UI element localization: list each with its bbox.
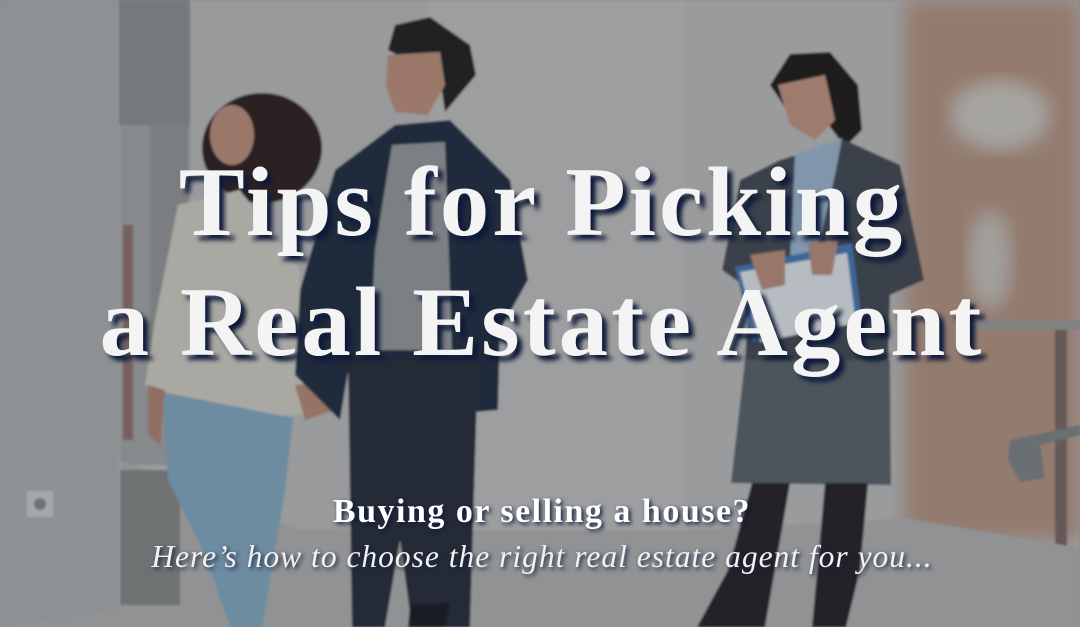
woman on the left bbox=[145, 93, 340, 627]
title bbox=[100, 148, 989, 384]
agent on the right bbox=[697, 52, 924, 627]
man in the middle bbox=[295, 17, 528, 627]
subtitle tagline: Here’s how to choose the right real estate agent for you... bbox=[151, 539, 933, 574]
subtitle question: Buying or selling a house? bbox=[333, 493, 751, 530]
title: Tips for Picking bbox=[179, 148, 905, 257]
title: a Real Estate Agent bbox=[100, 268, 984, 377]
